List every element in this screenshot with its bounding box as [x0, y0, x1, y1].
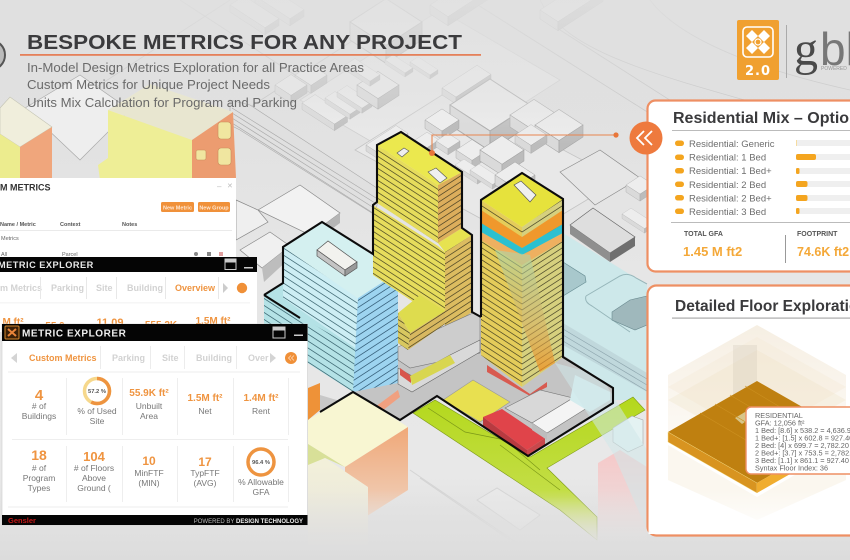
donut: allowable GFA	[238, 449, 284, 497]
legend rows: Residential: 1 Bed	[689, 152, 766, 164]
window footer: POWERED BY DESIGN TECHNOLOGY	[194, 519, 303, 525]
metric: unbuilt area: 55.9K ft²	[129, 388, 169, 399]
donut: allowable GFA: GFA	[252, 487, 270, 497]
metric: floors above ground	[74, 449, 114, 493]
logo: gbl wordmark	[786, 23, 850, 78]
title: BESPOKE METRICS FOR ANY PROJECT	[27, 31, 463, 54]
tabs: m Metrics	[0, 283, 42, 293]
metric: floors above ground: 104	[83, 449, 106, 464]
building: blue tower	[264, 222, 400, 411]
logo: gbl wordmark: POWERED	[821, 66, 847, 72]
metric: buildings: 4	[35, 387, 44, 404]
popup: floor readout: RESIDENTIAL	[755, 411, 803, 420]
popup: floor readout: Syntax Floor Index: 36	[755, 464, 828, 472]
window: custom metrics (back): All	[1, 252, 7, 258]
bar chart: unit mix	[796, 140, 850, 214]
green park	[413, 397, 645, 540]
donut: used site: Site	[90, 416, 105, 426]
tabs: Custom Metrics	[29, 353, 97, 363]
window header: METRIC EXPLORER	[22, 328, 127, 340]
buttons: New Group	[199, 205, 229, 211]
gray platform	[398, 313, 480, 368]
building: middle yellow tower	[373, 132, 480, 392]
stat: footprint	[797, 231, 849, 259]
peek values: M ft²	[2, 317, 24, 328]
window: custom metrics (back): Metrics	[1, 236, 19, 242]
window: overview metric explorer (middle)	[0, 257, 257, 332]
callout connector	[429, 132, 619, 156]
bottom fog	[0, 490, 850, 560]
left white blocks	[25, 75, 130, 160]
stat: total GFA	[683, 231, 742, 259]
buttons	[161, 202, 230, 212]
metric: program types: # of	[32, 463, 47, 473]
donut: allowable GFA: % Allowable	[238, 477, 284, 487]
logo: 2.0 badge: 2.0	[745, 64, 771, 79]
subtitle bullet text: Custom Metrics for Unique Project Needs	[27, 77, 270, 92]
window header	[2, 324, 308, 341]
tabs: Site	[96, 283, 113, 293]
donut: allowable GFA: 96.4 %	[252, 460, 270, 466]
podium	[398, 295, 445, 333]
floor stack diagram	[648, 325, 850, 534]
metric: min FTF	[134, 454, 164, 488]
stat: total GFA: TOTAL GFA	[684, 231, 723, 238]
window footer: Gensler	[8, 516, 36, 525]
left edge circle mark	[0, 40, 5, 70]
panel: detailed floor exploration	[648, 286, 850, 536]
title underline	[20, 54, 481, 56]
metric: floors above ground: Ground (	[77, 483, 111, 493]
metric: buildings	[22, 387, 56, 421]
tabs: Building	[127, 283, 163, 293]
right flat parcels	[560, 150, 640, 205]
metric: unbuilt area: Area	[140, 411, 158, 421]
metric grid rules	[8, 372, 300, 508]
metric: typ FTF: TypFTF	[190, 468, 220, 478]
stat: footprint: 74.6K ft2	[797, 245, 849, 259]
tabs: Over	[248, 353, 269, 363]
metric: min FTF: 10	[142, 454, 156, 468]
metric: typ FTF: (AVG)	[194, 478, 217, 488]
window footer	[2, 515, 308, 525]
building: right tower with highlighted floor	[481, 173, 563, 396]
metric: typ FTF: 17	[198, 455, 212, 469]
window: custom metrics (back): M METRICS	[0, 182, 50, 192]
subtitle bullet text: Units Mix Calculation for Program and Parking	[27, 95, 297, 110]
metric: unbuilt area: Unbuilt	[136, 401, 163, 411]
window: custom metrics (back): Context	[60, 222, 81, 228]
metric: program types: Program	[23, 473, 55, 483]
metric: program types	[23, 447, 55, 493]
tabs	[0, 277, 250, 303]
window: custom metrics (back)	[0, 178, 236, 263]
stat: total GFA: 1.45 M ft2	[683, 244, 742, 259]
window: custom metrics (back): Parcel	[62, 252, 78, 258]
metric: program types: Types	[28, 483, 50, 493]
pink building	[598, 450, 647, 540]
legend rows: Residential: 2 Bed+	[689, 194, 772, 204]
legend rows	[675, 139, 775, 218]
metric: floors above ground: Above	[82, 473, 106, 483]
window: custom metrics (back): ✕	[227, 183, 233, 190]
peek values: 55.9	[45, 321, 65, 332]
legend rows: Residential: Generic	[689, 139, 775, 150]
tabs	[11, 346, 297, 369]
logo: gbl wordmark: g	[794, 23, 818, 76]
metric: program types: 18	[31, 447, 47, 463]
panel: residential mix	[648, 100, 850, 272]
subtitle bullet text	[27, 60, 365, 110]
legend rows: Residential: 3 Bed	[689, 207, 766, 218]
legend rows: Residential: 1 Bed+	[689, 166, 772, 177]
window: custom metrics explorer (front)	[2, 324, 308, 525]
metric: min FTF: MinFTF	[134, 468, 164, 478]
donut: used site: 57.2 %	[88, 389, 106, 395]
metric: rent: 1.4M ft²	[244, 393, 279, 404]
popup: floor readout: GFA: 12,056 ft²	[755, 418, 805, 428]
window: custom metrics (back): Name / Metric	[0, 222, 36, 228]
orange building behind window	[308, 383, 320, 420]
peek values: 11.09	[97, 317, 123, 329]
metric: unbuilt area	[129, 388, 169, 421]
light blue ground	[563, 233, 647, 400]
metric: floors above ground: # of Floors	[74, 463, 114, 473]
popup: floor readout	[746, 407, 850, 474]
window: custom metrics (back): Notes	[122, 222, 137, 228]
metric: buildings: Buildings	[22, 411, 56, 421]
metric: rent	[244, 393, 279, 416]
faint road lines bottom	[410, 470, 520, 545]
metric: net	[188, 393, 223, 416]
window: overview metric explorer (middle): METRIC EXPLORER	[0, 260, 94, 270]
site buildings: parcels, red and white blocks	[443, 363, 647, 530]
metric: min FTF: (MIN)	[138, 478, 160, 488]
metric: rent: Rent	[252, 406, 271, 416]
metric: net: 1.5M ft²	[188, 393, 223, 404]
tabs: Parking	[51, 283, 84, 293]
roof unit	[317, 241, 357, 276]
tabs: Building	[196, 353, 232, 363]
window: custom metrics (back): –	[217, 182, 222, 191]
tabs: Overview	[175, 283, 216, 293]
heavy site outlines	[264, 132, 613, 456]
highway band	[230, 100, 380, 215]
donut: used site	[77, 378, 117, 426]
tabs: Site	[162, 353, 179, 363]
logo: 2.0 badge	[737, 20, 779, 80]
metric: typ FTF	[190, 455, 220, 488]
peek values: 555.2K	[145, 320, 178, 331]
stat: footprint: FOOTPRINT	[797, 231, 838, 238]
donut: used site: % of Used	[77, 406, 117, 416]
subtitle bullet text: In-Model Design Metrics Exploration for all Practice Areas	[27, 60, 365, 75]
metric: net: Net	[198, 406, 212, 416]
legend rows: Residential: 2 Bed	[689, 180, 766, 191]
buttons: New Metric	[163, 205, 192, 211]
site platform	[353, 317, 613, 456]
peek values	[2, 316, 231, 332]
building: cream block bottom left	[308, 392, 408, 545]
building: cream block top left (B) with orange facade	[98, 84, 236, 180]
peek values: 1.5M ft²	[196, 316, 231, 327]
metric: buildings: # of	[32, 401, 47, 411]
tabs: Parking	[112, 353, 145, 363]
icon: collapse chevrons	[630, 122, 662, 154]
building: cream block top left (A)	[0, 97, 52, 180]
